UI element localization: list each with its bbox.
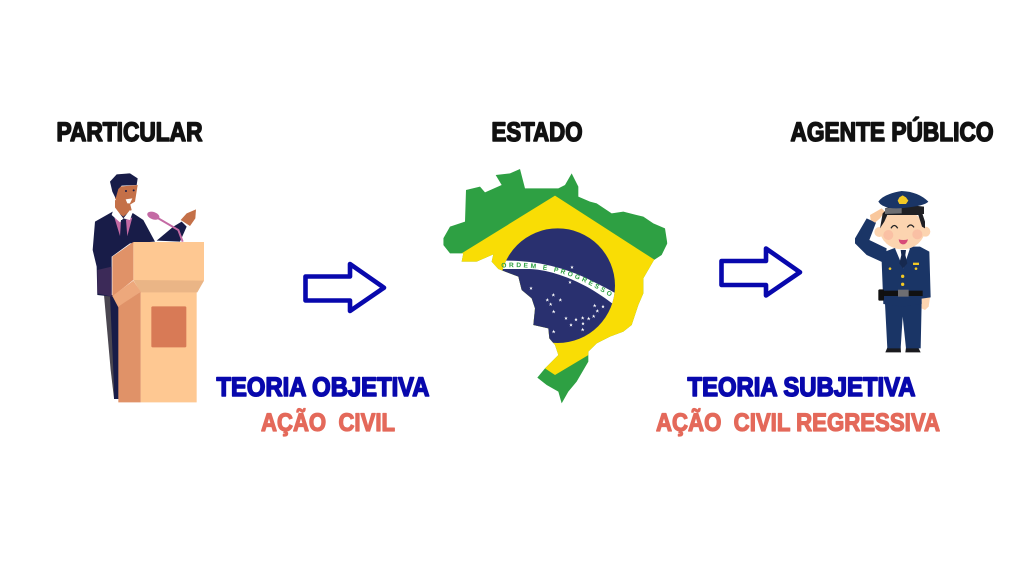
podium: [133, 242, 204, 402]
heading: estado: ESTADO: [492, 117, 582, 147]
trousers: [885, 302, 922, 348]
shoes: [885, 348, 921, 352]
face: [874, 227, 884, 237]
motto band text: ORDEM E PROGRESSO: [502, 262, 612, 296]
label: ação civil: AÇÃO CIVIL: [261, 407, 395, 437]
shirt and tie: [895, 248, 910, 268]
legs: [104, 295, 118, 398]
microphone: [157, 217, 183, 242]
illustration: saluting police officer: [855, 191, 931, 352]
right hand: [922, 297, 930, 310]
shirt and tie: [114, 217, 132, 236]
label: teoria objetiva: TEORIA OBJETIVA: [216, 372, 430, 402]
label: teoria subjetiva: TEORIA SUBJETIVA: [688, 372, 916, 402]
hand: [181, 209, 196, 226]
stars: [529, 265, 605, 333]
arrow: estado to agente público: [722, 248, 800, 296]
label: ação civil regressiva: AÇÃO CIVIL REGRESSIVA: [656, 407, 940, 437]
heading: particular: PARTICULAR: [56, 117, 202, 147]
saluting arm: [855, 218, 887, 263]
neck: [115, 200, 132, 217]
jacket: [93, 212, 155, 297]
belt: [883, 291, 923, 296]
head: [115, 185, 138, 207]
buttons: [889, 263, 919, 286]
arrow: particular to estado: [306, 264, 384, 311]
jacket body: [882, 247, 931, 307]
cap: [885, 205, 924, 215]
illustration: speaker at podium: [93, 173, 204, 402]
illustration: map of Brazil with flag: [443, 169, 668, 404]
